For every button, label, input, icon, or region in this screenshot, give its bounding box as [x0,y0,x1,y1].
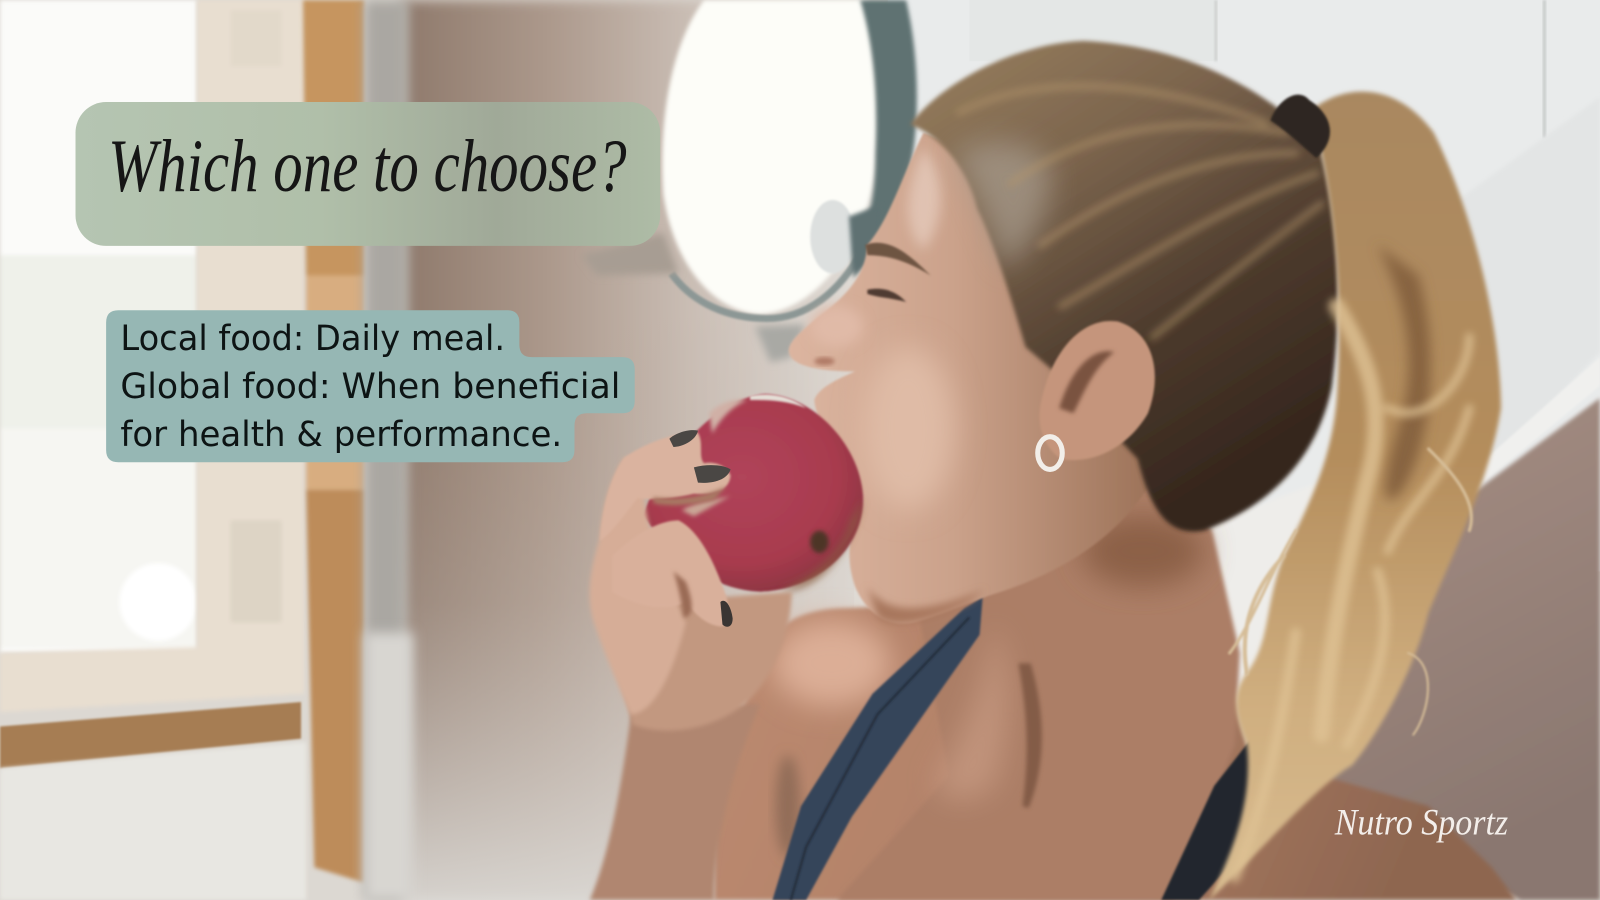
hair tie [1270,95,1330,158]
advice text [120,319,620,455]
apple [643,394,863,592]
nail: index [669,430,698,447]
neck shade under hair [1082,515,1204,587]
palm [602,571,792,731]
upper white wall [888,0,1600,571]
wall [364,0,893,900]
knuckle crease [673,571,692,617]
face [789,133,1153,624]
right strap [1161,714,1270,900]
golden hair strands [959,86,1321,337]
lower wall panel [0,742,306,900]
ponytail [1209,92,1501,900]
chest highlight [772,620,891,706]
nose highlight [810,306,863,347]
left strap [772,597,983,900]
ponytail dark core [1378,245,1431,500]
thumb and index fingers [600,433,731,541]
stair stringer [1459,97,1600,480]
grey temple hair [954,142,1050,270]
hand [589,430,792,731]
back of hand [589,457,686,714]
forehead highlight [908,148,941,250]
ponytail highlights [1235,306,1469,878]
nail: thumb [694,465,731,483]
white gap behind neck [1204,480,1337,704]
title bubble [76,102,660,246]
grey recess [364,0,408,900]
forearm [590,704,760,900]
finger shadow [653,486,727,505]
ear [1039,321,1155,460]
closed eye [867,289,906,302]
advice bubble [106,310,635,462]
advice text: for health & performance. [120,415,562,455]
round mirror [582,0,917,362]
eyebrow [865,243,931,276]
window sill [0,702,301,768]
shoulder shadow [776,755,800,857]
hair mass [910,41,1338,532]
wooden post [303,0,364,883]
lower right wall [1306,398,1600,900]
nail: middle [720,601,733,627]
advice text: Local food: Daily meal. [120,319,505,359]
nostril [814,357,835,365]
fist [612,520,729,627]
window glass [0,0,197,653]
chin shadow [867,587,985,624]
body and shoulders [714,531,1516,900]
title text: Which one to choose? [108,125,627,208]
neck light ridge [934,622,1008,800]
cheek highlight [862,347,954,510]
neck tendon shadow [1018,663,1042,808]
neck [837,480,1240,900]
advice text: Global food: When beneficial [120,367,620,407]
loose curls over the white gap [1230,449,1471,735]
inner ear shadow [1059,351,1114,413]
strap inner line [791,617,969,900]
window frame [0,0,304,712]
brand signature: Nutro Sportz [1334,802,1508,843]
hoop earring [1038,437,1062,469]
